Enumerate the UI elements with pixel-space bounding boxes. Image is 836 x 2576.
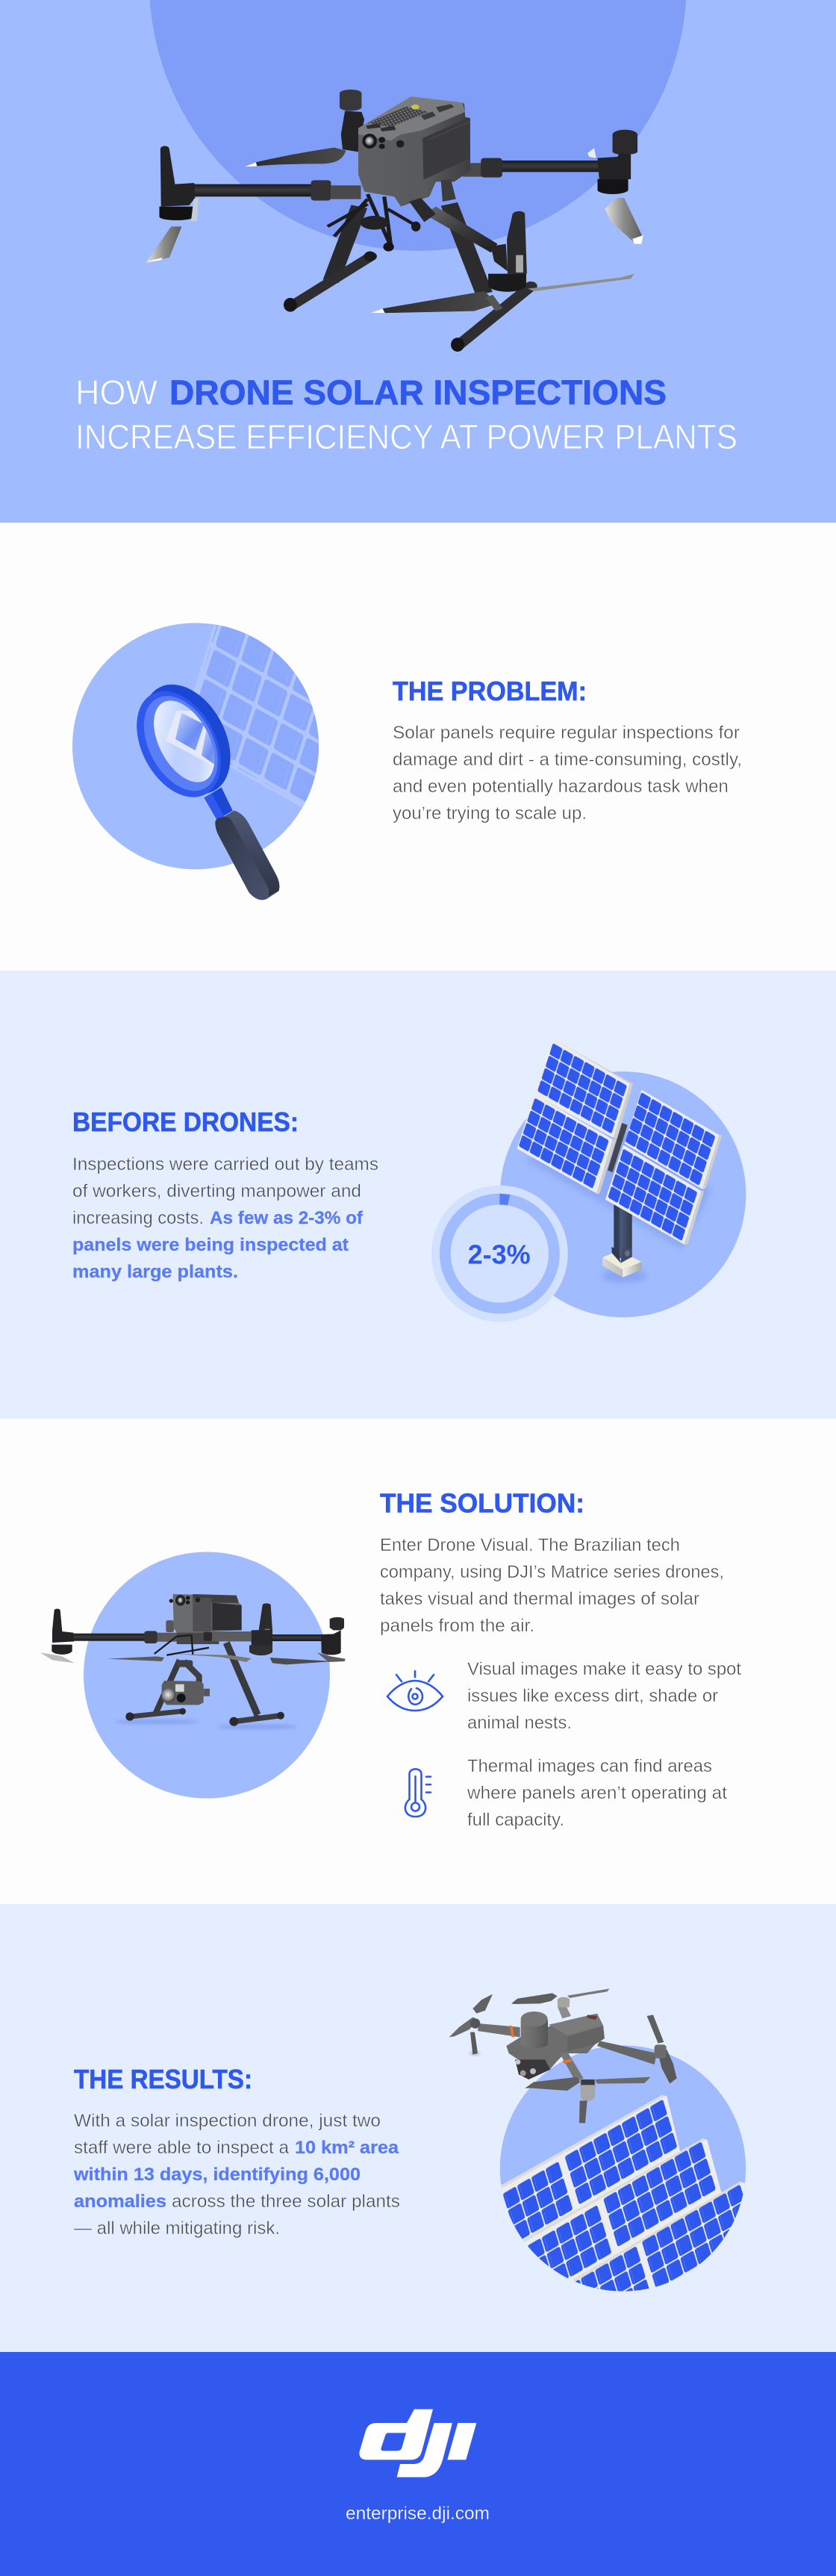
text block: across the three solar plants	[172, 2191, 400, 2212]
text block	[72, 1154, 378, 1282]
text block: many large plants.	[72, 1262, 238, 1282]
text block: visual images: animal nests.	[467, 1713, 572, 1733]
heading: BEFORE DRONES:	[72, 1107, 299, 1137]
text block: of workers, diverting manpower and	[72, 1181, 361, 1201]
website url: enterprise.dji.com	[346, 2504, 490, 2524]
illustration: drone above solar panels	[449, 1988, 746, 2292]
text block: visual images: issues like excess dirt, shade or	[467, 1686, 718, 1706]
text block: takes visual and thermal images of solar	[380, 1589, 699, 1609]
text block: Solar panels require regular inspections for	[393, 723, 740, 743]
text block: With a solar inspection drone, just two	[74, 2111, 381, 2131]
heading: THE RESULTS:	[74, 2064, 252, 2094]
icon: thermometer	[405, 1769, 431, 1817]
text block: anomalies	[74, 2191, 166, 2212]
donut chart: 2-3%: 2-3%	[468, 1239, 531, 1270]
panel: hero	[0, 0, 836, 523]
hero background circle	[149, 0, 687, 251]
illustration: magnifying glass over solar panel	[72, 612, 334, 900]
text block: — all while mitigating risk.	[74, 2218, 280, 2239]
text block: visual images	[467, 1659, 741, 1733]
text block: staff were able to inspect a	[74, 2138, 290, 2158]
icon: eye	[387, 1671, 443, 1711]
logo: dji	[359, 2409, 476, 2477]
text block	[380, 1535, 724, 1636]
donut chart: 2-3%	[431, 1185, 568, 1322]
panel: the results	[0, 1904, 836, 2352]
text block: panels from the air.	[380, 1616, 534, 1636]
title: INCREASE EFFICIENCY AT POWER PLANTS	[75, 417, 737, 456]
text block: 10 km² area	[295, 2138, 399, 2158]
panel: footer	[0, 2352, 836, 2576]
panel: before drones	[0, 971, 836, 1419]
heading: THE PROBLEM:	[393, 676, 587, 706]
concrete base	[602, 1253, 641, 1278]
text block: you’re trying to scale up.	[393, 803, 587, 824]
text block: Enter Drone Visual. The Brazilian tech	[380, 1535, 680, 1555]
title	[75, 373, 737, 456]
text block: As few as 2-3% of	[210, 1208, 364, 1228]
illustration: Matrice drone	[146, 90, 643, 352]
title: DRONE SOLAR INSPECTIONS	[169, 373, 667, 412]
heading: THE SOLUTION:	[380, 1487, 584, 1519]
text block: thermal images: Thermal images can find areas	[467, 1756, 712, 1776]
text block: within 13 days, identifying 6,000	[73, 2165, 361, 2185]
panel: the solution	[0, 1419, 836, 1904]
text block: thermal images	[467, 1756, 727, 1830]
text block: company, using DJI’s Matrice series drones,	[380, 1562, 724, 1582]
illustration: solar panel on circle	[431, 1039, 746, 1322]
text block: thermal images: where panels aren’t operating at	[467, 1783, 727, 1803]
text block	[73, 2111, 400, 2239]
title: HOW	[75, 373, 158, 412]
panel: the problem	[72, 623, 740, 900]
text block: visual images: Visual images make it easy to spot	[467, 1659, 741, 1679]
text block: increasing costs.	[72, 1208, 204, 1228]
text block: panels were being inspected at	[72, 1235, 349, 1255]
illustration: drone with gimbal camera	[40, 1552, 346, 1798]
text block: thermal images: full capacity.	[467, 1810, 564, 1830]
text block	[393, 723, 742, 824]
text block: and even potentially hazardous task when	[393, 777, 729, 797]
text block: damage and dirt - a time-consuming, costly,	[393, 750, 742, 770]
text block: Inspections were carried out by teams	[72, 1154, 378, 1175]
